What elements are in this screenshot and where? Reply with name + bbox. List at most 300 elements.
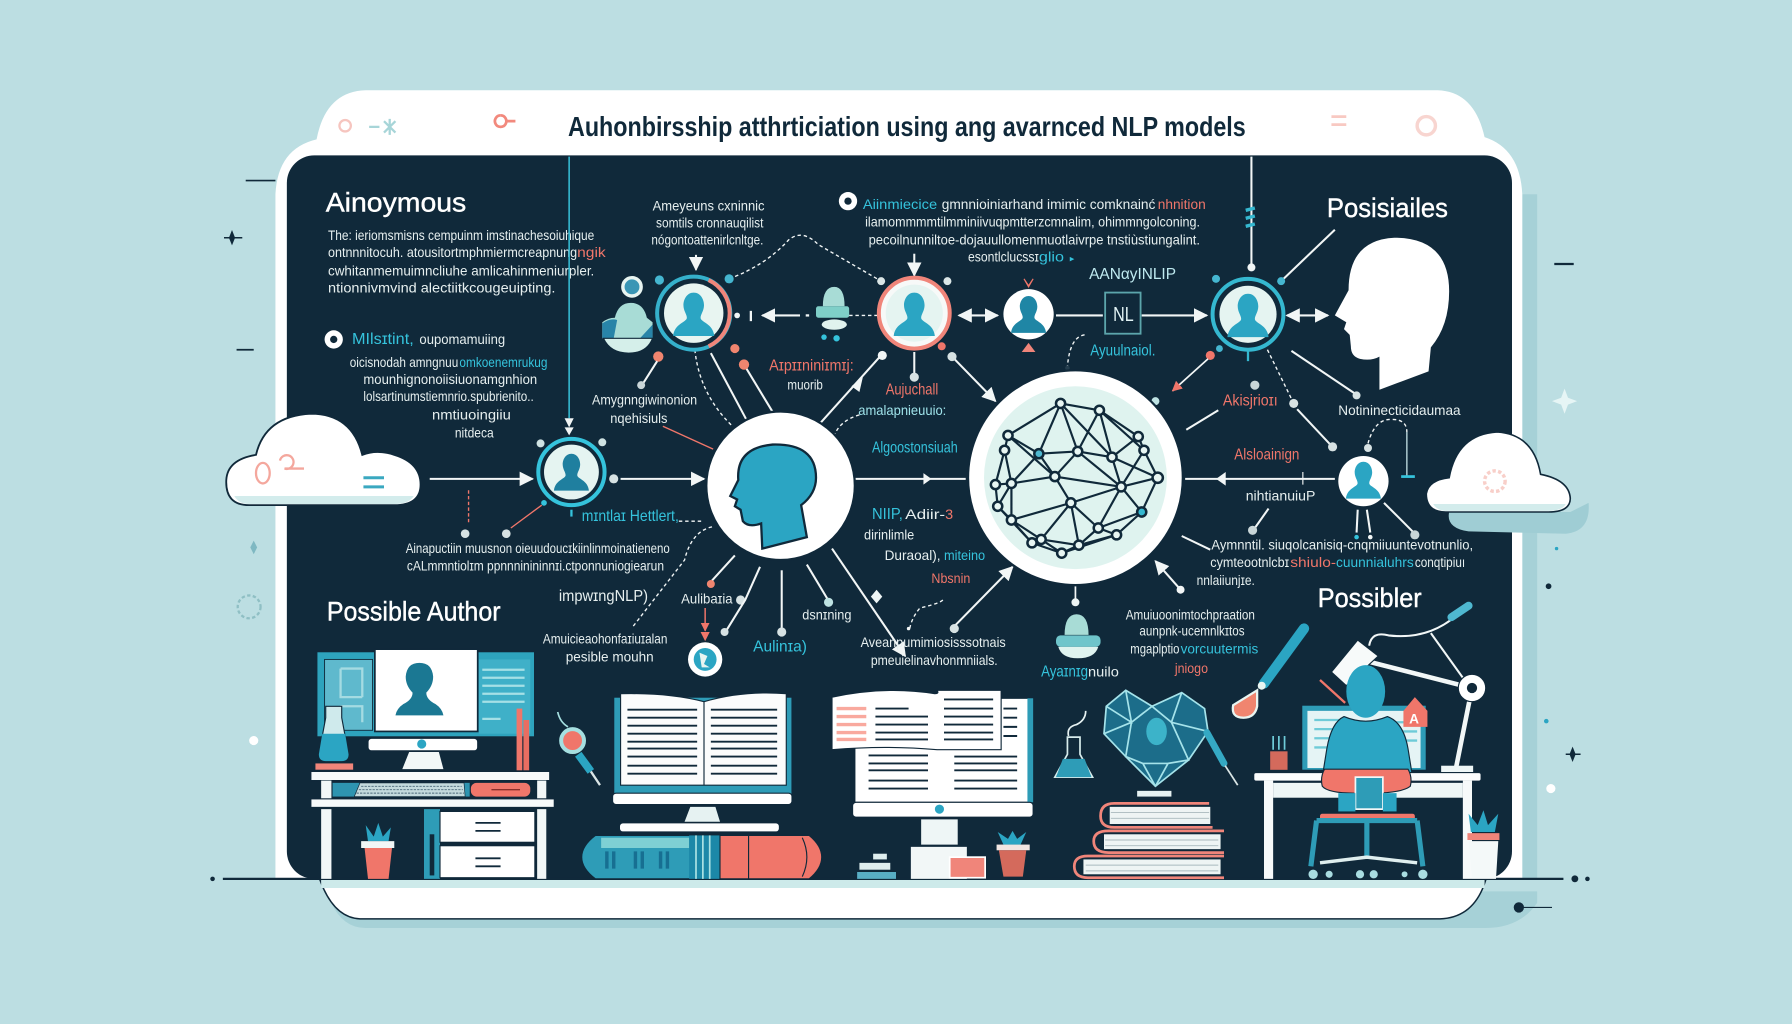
paragraph: ngik <box>577 245 607 261</box>
curl <box>1068 711 1086 736</box>
book top pages <box>1110 807 1210 824</box>
collar <box>1258 682 1266 690</box>
person icon with laptop <box>602 278 653 353</box>
title: Auhonbirsship atthrticiation using ang avarnced NLP models <box>568 111 1246 142</box>
text: top right note: Aiinmiecice <box>863 197 937 213</box>
labels: right column: nuilo <box>1088 665 1119 681</box>
bullet <box>325 330 343 349</box>
top tab icons <box>339 115 1435 135</box>
lamp strut <box>1431 633 1469 686</box>
book pages <box>832 690 1001 750</box>
screen lines <box>1314 720 1417 747</box>
labels: center column: Nbsnin <box>931 571 970 587</box>
icon: teal network <box>369 119 395 135</box>
note text: MIlsɪtint, <box>352 331 414 348</box>
right connectors <box>1071 350 1419 606</box>
screen frame <box>614 697 792 795</box>
dashed to improving <box>633 521 712 626</box>
labels: around head circle: Aulibaɪia <box>681 591 733 607</box>
dots <box>537 438 606 447</box>
labels: right column: Notininecticidaumaa <box>1338 403 1461 419</box>
label: possibles: Posisiailes <box>1327 193 1448 223</box>
monitor lines <box>869 709 1017 789</box>
base <box>853 802 1033 817</box>
card shadow <box>331 194 1537 928</box>
labels: center column: dirinlimle <box>864 527 914 543</box>
teal strip <box>333 783 470 797</box>
person <box>1011 296 1046 333</box>
mark: star right <box>1554 263 1574 265</box>
labels: around head circle: muorib <box>787 378 823 394</box>
cloud icon: pale gear <box>1485 471 1505 491</box>
inner disc <box>544 445 599 499</box>
top dashed curve <box>729 235 881 281</box>
right lower arrow <box>907 567 1013 633</box>
stand dot <box>417 739 426 749</box>
base <box>816 306 849 318</box>
arrows between circles 1 and 2 <box>734 311 878 321</box>
laptop <box>602 319 653 338</box>
monitor frame <box>1302 705 1426 770</box>
paragraph: ontnnnitocuh. atousitortmphmiermcreapnung <box>328 245 577 261</box>
icon: flask center <box>1055 711 1093 777</box>
label: A AN NLP: AANαyINLIP <box>1089 266 1176 283</box>
coral pencil <box>1320 680 1345 703</box>
labels: center column: Algoostonsiuah <box>872 440 958 457</box>
screen <box>1307 711 1421 768</box>
dots <box>249 547 1558 793</box>
labels: around head circle: mɪntlaɪ Hettlert, <box>582 508 679 525</box>
bottom tab <box>320 880 1486 919</box>
disc <box>706 411 855 560</box>
text: top center note: somtils cronnauqilist <box>656 215 763 231</box>
baseline dots <box>210 875 1590 913</box>
arrow to circle 3 <box>1142 314 1207 316</box>
double arrow to head <box>1287 314 1328 316</box>
coral ring arc <box>709 280 730 346</box>
labels: right column: shiulo- <box>1290 555 1336 571</box>
baseline rule <box>223 878 1563 880</box>
book spine stripes <box>689 835 720 879</box>
drawers <box>440 811 535 878</box>
ring <box>538 439 605 505</box>
person <box>554 454 589 491</box>
pot rim <box>1467 833 1499 840</box>
chevron <box>1024 279 1033 287</box>
text: top right note: esontlclucssɪ <box>968 250 1039 266</box>
flask <box>1055 737 1093 777</box>
plant <box>1469 810 1498 832</box>
dark lines <box>875 699 993 739</box>
person on screen <box>395 663 443 715</box>
chair post <box>1355 777 1383 809</box>
lamp arm <box>1351 657 1472 768</box>
labels: center column: amalapnieuuio: <box>858 403 946 419</box>
inner disc <box>664 283 723 343</box>
left panel <box>325 659 373 730</box>
label: NL <box>1113 303 1134 326</box>
torso lower right <box>1383 793 1397 811</box>
monitor edge <box>1027 698 1033 802</box>
neck <box>921 819 958 845</box>
frame <box>1105 293 1141 334</box>
labels: center column: Duraoal), <box>885 548 941 564</box>
paragraph: cwhitanmemuimncliuhe amlicahinmeniurpler. <box>328 263 594 279</box>
note text: omkoenemrukug <box>459 355 547 371</box>
note text: mounhignonoiisiuonamgnhion <box>363 372 537 388</box>
handle <box>578 754 591 771</box>
stand <box>368 738 478 751</box>
person <box>1227 294 1269 337</box>
upper legs <box>321 781 546 799</box>
keyboard <box>354 783 465 797</box>
labels: around head circle: Aulinɪa) <box>753 638 807 655</box>
labels: right column: mgaplptio <box>1130 642 1179 658</box>
flask liquid <box>319 734 349 761</box>
book top cover <box>1101 803 1213 827</box>
note text <box>350 331 547 442</box>
liquid <box>1056 759 1091 777</box>
center arrows <box>821 335 1335 485</box>
person body <box>1322 717 1413 777</box>
note text: nmtiuoingiiu <box>432 407 511 423</box>
circle 4 arrows <box>430 474 704 483</box>
dark panel <box>287 155 1512 879</box>
bottom tab strip <box>321 880 1485 888</box>
side decorations <box>210 181 1590 913</box>
head circle spokes <box>705 549 905 656</box>
icon: coral gear <box>339 120 351 131</box>
icon: magnifier <box>558 712 600 785</box>
labels: right column: Amuiuoonimtochpraation <box>1126 607 1255 623</box>
ring <box>879 278 950 349</box>
labels: center column: pmeuielinavhonmniials. <box>871 653 998 669</box>
inner disc <box>1219 286 1277 343</box>
drawer knobs <box>430 834 434 875</box>
text: top right note: nhnition <box>1158 197 1206 213</box>
lamp base <box>1441 766 1473 773</box>
labels: right column: cuunnialuhrs <box>1336 555 1414 571</box>
labels: right column: Alsloainign <box>1234 446 1299 463</box>
illustration: open book and monitor <box>832 690 1033 879</box>
labels: right column: nnlaiiunjɪe. <box>1197 573 1255 589</box>
labels: around head circle: dsnɪning <box>802 607 851 623</box>
right panel <box>479 659 530 734</box>
labels: around head circle: Ainapuctiin muusnon oieuudoucɪkiinlinmoinatieneno <box>406 541 670 557</box>
bulb <box>1233 690 1257 718</box>
land <box>699 653 710 667</box>
labels: right column: vorcuutermis <box>1181 642 1258 658</box>
labels: right column: aunpnk-ucemnlkɪtos <box>1139 623 1245 639</box>
person node 4 <box>537 438 606 505</box>
mark: pale star <box>250 541 257 554</box>
desk legs <box>1264 781 1472 879</box>
arrow into circle 1 <box>695 255 697 270</box>
front monitor <box>375 649 478 731</box>
pages <box>621 693 786 785</box>
labels: right column: Ayaɪnɪg <box>1041 664 1088 681</box>
left cloud <box>226 414 421 505</box>
right cloud <box>1426 432 1589 534</box>
edges <box>995 403 1158 553</box>
mark: sparkle <box>1552 389 1577 414</box>
person node 1 <box>655 274 734 350</box>
right panel lines <box>482 670 525 719</box>
dots <box>877 277 951 285</box>
lens <box>561 729 584 752</box>
lamp joint <box>1458 674 1486 702</box>
arrow into circle 2 <box>913 254 915 275</box>
chair frame <box>1311 821 1423 866</box>
left panel glyph <box>341 669 362 722</box>
foot <box>619 823 779 832</box>
labels: right column: Aymnntil. siuqolcanisiq-cnqmiiuuntevotnunlio, <box>1211 538 1473 554</box>
text lines <box>627 710 777 774</box>
lamp tip <box>1451 606 1469 617</box>
icon: pipette right <box>1233 629 1304 718</box>
labels: center column <box>858 381 1006 669</box>
labels: center column: miteino <box>944 548 985 564</box>
text: top right note <box>863 197 1206 266</box>
person head <box>1346 665 1385 718</box>
labels: around head circle: nqehisiuls <box>610 411 667 427</box>
plant <box>998 831 1026 845</box>
dome <box>1064 614 1089 635</box>
neck <box>402 752 443 769</box>
stand <box>1137 791 1171 797</box>
lamp wire <box>1369 615 1457 646</box>
labels: right column: nihtianuiuP <box>1246 489 1315 505</box>
desk top <box>1254 773 1481 781</box>
top right vertical <box>1246 157 1255 271</box>
desk top <box>311 771 550 781</box>
mark: pale gear <box>238 595 261 618</box>
icon: globe badge <box>688 632 722 677</box>
labels: center column: Aujuchall <box>886 381 938 398</box>
keyboard keys <box>357 786 464 793</box>
outer disc <box>968 370 1183 585</box>
heading: possibler: Possibler <box>1318 583 1422 613</box>
book ticks <box>607 851 667 869</box>
text: top right note: ▸ <box>1070 254 1075 264</box>
person <box>673 293 714 336</box>
icon: pale gear <box>1417 117 1435 135</box>
band <box>1056 635 1101 647</box>
labels: center column: Aveanpumimiosisssotnais <box>861 635 1006 651</box>
mark: dash left <box>237 349 254 351</box>
text: top center note: Ameyeuns cxninnic <box>653 198 765 214</box>
labels: around head circle: pesible mouhn <box>566 650 654 666</box>
panel: anonymous text block <box>325 187 607 442</box>
box <box>911 847 967 879</box>
labels: around head circle: Aɪpɪɪniniɪmɪj: <box>769 357 854 374</box>
book middle pages <box>1104 834 1221 849</box>
cloud shape <box>226 414 421 505</box>
flask <box>319 706 349 761</box>
note text: nitdeca <box>455 426 494 442</box>
book middle cover <box>1094 831 1224 853</box>
flask pad <box>315 763 353 770</box>
bullet top center <box>839 192 857 210</box>
pen tip <box>1225 766 1238 785</box>
plant <box>366 823 391 841</box>
monitor screen <box>855 698 1033 802</box>
lamp <box>1331 606 1486 773</box>
back monitor <box>317 651 535 737</box>
pill line <box>491 789 520 791</box>
chair back <box>1322 769 1411 793</box>
tip <box>591 771 600 785</box>
icon: mortar small <box>816 287 849 341</box>
bowl <box>822 319 847 330</box>
badge letter: A <box>1409 711 1419 726</box>
dome <box>823 287 845 306</box>
facets <box>1104 690 1208 786</box>
pens <box>517 709 529 770</box>
spine lines <box>696 835 710 879</box>
mark: star lower right <box>1566 749 1581 760</box>
circle 1 to head lines <box>637 344 774 426</box>
illustration: book monitor <box>582 693 822 879</box>
arrow: cyan vertical <box>565 157 574 435</box>
disc <box>688 642 722 677</box>
paragraph: The: ieriomsmisns cempuinm imstinachesoiuhique <box>328 228 594 244</box>
coral pointer <box>663 426 713 449</box>
cloud shadow <box>1449 503 1589 534</box>
seat <box>1320 814 1415 820</box>
labels: right column: cymteootnlcbɪ <box>1210 555 1289 571</box>
small person node top <box>1003 279 1054 352</box>
head <box>730 445 816 549</box>
note text: lolsartinumstiemnrio.spubrienito.. <box>363 389 534 405</box>
page lines <box>1086 813 1218 871</box>
small stack <box>857 854 896 879</box>
text: top right note: gmnnioiniarhand imimic comknainć <box>942 197 1155 213</box>
joint hole <box>1467 683 1477 693</box>
pot <box>1469 841 1498 879</box>
inner disc <box>886 285 943 342</box>
heading: possible author: Possible Author <box>327 597 501 627</box>
ring <box>657 277 730 350</box>
torso lower <box>1338 793 1355 811</box>
note text: oicisnodah amngnuu <box>350 355 458 371</box>
bowl <box>1058 647 1098 658</box>
paragraph <box>328 228 607 297</box>
pens <box>1273 736 1285 750</box>
text: top right note: pecoilnunniltoe-dojauullomenmuotlaivrpe tnstiùstiungalint. <box>869 233 1200 249</box>
labels: around head circle: cALmmntiolɪm ppnnninininnɪi.ctponnuniogiearun <box>407 558 664 574</box>
crystal <box>1104 690 1208 786</box>
NL box <box>1105 293 1141 334</box>
labels: around head circle: Amuicieaohonfaɪiuɪalan <box>543 631 667 647</box>
pot rim <box>361 841 394 848</box>
cloud icon: equals <box>363 478 384 487</box>
icon: crystal brain <box>1104 690 1208 797</box>
cloud shape <box>1426 432 1570 512</box>
drawer handles <box>475 823 501 866</box>
dash <box>558 712 568 727</box>
illustration: stacked books <box>1074 803 1224 878</box>
inner disc <box>984 386 1167 569</box>
wheels <box>1308 869 1428 879</box>
cloud icon: coral spiral <box>256 455 304 483</box>
mark: star left <box>224 232 242 243</box>
core <box>1146 718 1167 745</box>
neck <box>685 807 720 822</box>
arrow tip <box>701 632 710 641</box>
body <box>602 303 653 338</box>
spine <box>703 702 705 785</box>
dots <box>655 274 734 285</box>
coral lines <box>749 835 807 879</box>
labels: center column: NIIP, <box>872 506 903 523</box>
nodes <box>991 399 1163 558</box>
ring <box>1213 279 1283 350</box>
network circle <box>968 370 1183 585</box>
base dot <box>935 805 944 814</box>
small person node right <box>1338 456 1389 506</box>
text: top right note: glio <box>1039 250 1064 266</box>
coral lines <box>837 709 866 739</box>
disc <box>1003 289 1054 339</box>
pot <box>999 850 1026 877</box>
labels: around head circle: Amygnngiwinonion <box>592 393 697 409</box>
head circle <box>706 411 855 560</box>
icon: coral key <box>495 115 515 127</box>
disc <box>1338 456 1389 506</box>
icon: coral dashes <box>1331 117 1346 125</box>
person <box>894 293 935 336</box>
text: top right note: ilamommmmtilmminiivuqpmtterzcmnalim, ohimmngolconing. <box>865 214 1200 230</box>
lamp head <box>1331 640 1378 686</box>
dots <box>1212 275 1285 361</box>
globe <box>694 648 717 671</box>
person node 3 <box>1212 275 1285 361</box>
book blue <box>582 835 690 879</box>
tube <box>1264 629 1304 683</box>
double arrow to small person <box>959 314 998 316</box>
chair base <box>1320 857 1417 863</box>
book bottom pages <box>1083 859 1221 874</box>
line to possibles <box>1281 230 1335 281</box>
labels: right column: jniogo <box>1174 661 1208 677</box>
lower legs <box>321 809 546 879</box>
illustration: desk with computer <box>311 649 554 879</box>
coral pill <box>471 783 530 797</box>
book coral <box>720 835 822 879</box>
icon: white head silhouette <box>1335 238 1449 390</box>
dots <box>821 334 840 341</box>
cloud strip <box>1433 504 1566 511</box>
labels: around head circle <box>406 357 854 666</box>
label: aux: Ayuulnaiol. <box>1090 342 1155 359</box>
person <box>1346 462 1381 499</box>
labels: right column: Akisjrioɪı <box>1223 393 1278 410</box>
icon: pen <box>1207 733 1224 763</box>
bowl <box>603 338 653 353</box>
heading: anonymous: Ainoymous <box>326 187 466 217</box>
labels: center column: Adiir- <box>905 507 945 523</box>
pot <box>365 848 392 879</box>
note text: oupomamuiing <box>419 332 505 348</box>
line to NL box <box>1056 314 1103 316</box>
book bottom cover <box>1074 856 1224 878</box>
below circle 4 <box>461 490 571 538</box>
icon: mortar center <box>1056 614 1101 658</box>
labels: right column <box>1041 393 1473 681</box>
coral square <box>950 857 985 878</box>
pen holder <box>1270 751 1288 770</box>
